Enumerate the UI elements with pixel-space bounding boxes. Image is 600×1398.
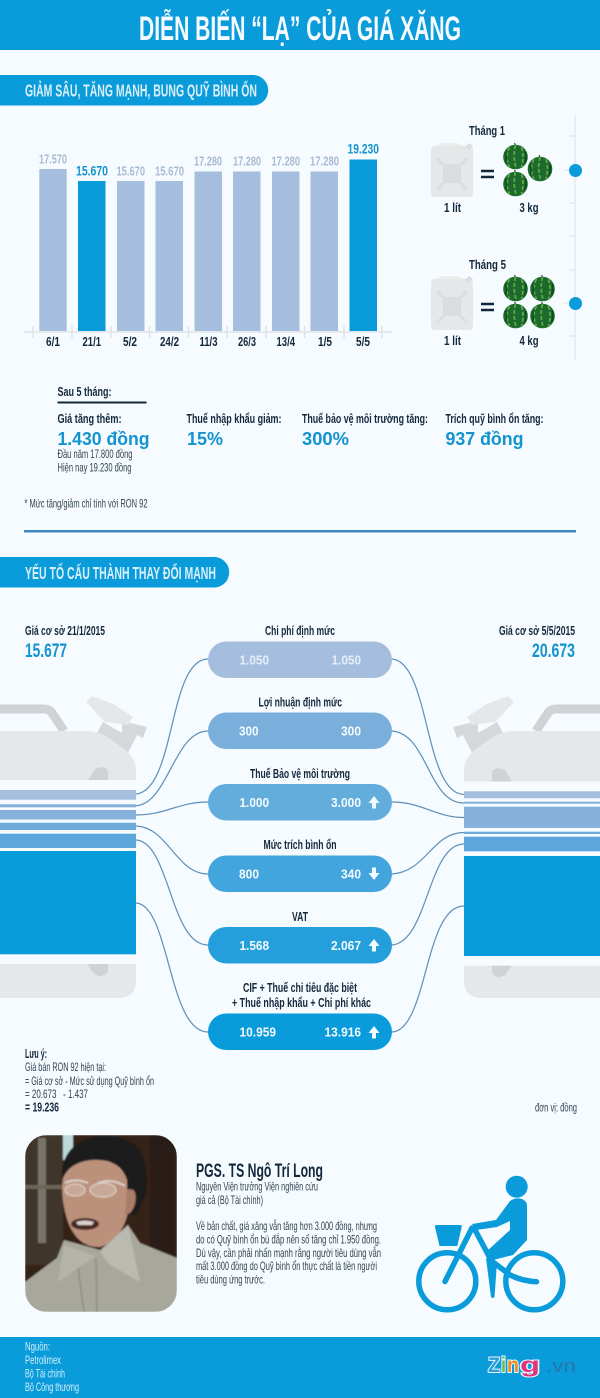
row: norm profit: 300	[341, 724, 361, 738]
bar chart: gasoline price: 11/3	[200, 334, 218, 349]
row: norm profit	[208, 694, 392, 749]
comparison: month 5	[431, 257, 555, 348]
comparison: month 1: 1 lít	[444, 200, 462, 215]
note: Giá bán RON 92 hiện tại:	[25, 1060, 106, 1074]
quote: expert	[196, 1161, 381, 1286]
timeline	[563, 115, 582, 360]
row: stabilization fund	[208, 837, 392, 892]
note: Lưu ý:	[25, 1046, 47, 1061]
quote: expert: Dù vậy, cần phải nhấn mạnh rằng người tiêu dùng vẫn	[196, 1245, 381, 1260]
bar chart: gasoline price: 17.280	[272, 154, 300, 168]
row: stabilization fund: 800	[239, 868, 259, 882]
stats: after 5 months: Sau 5 tháng:	[58, 384, 112, 399]
row: norm profit: 300	[239, 724, 259, 738]
stat: price increase: Đầu năm 17.800 đồng	[58, 447, 132, 461]
row: norm cost: 1.050	[332, 654, 361, 668]
stat: stabilization fund: Trích quỹ bình ổn tăng:	[446, 411, 544, 426]
unit: đơn vị: đồng	[535, 1100, 577, 1114]
bar chart: gasoline price: 6/1	[46, 334, 60, 349]
quote: expert: Về bản chất, giá xăng vẫn tăng hơn 3.000 đồng, nhưng	[196, 1218, 377, 1233]
bar chart: gasoline price: 17.280	[310, 154, 339, 168]
icon: arrow down	[368, 868, 380, 880]
stat: price increase: Hiện nay 19.230 đồng	[58, 460, 132, 474]
stat: environment tax	[302, 411, 428, 449]
note: = Giá cơ sở - Mức sử dụng Quỹ bình ổn	[25, 1074, 154, 1088]
row: VAT	[208, 909, 392, 964]
stat: price increase	[58, 411, 150, 474]
heading: section 1: GIẢM SÂU, TĂNG MẠNH, BUNG QUỸ BÌNH ỔN	[25, 80, 257, 100]
comparison: month 5: Tháng 5	[469, 257, 506, 272]
note: = 19.236	[25, 1100, 59, 1114]
logo: i	[501, 1354, 506, 1377]
row: CIF and other costs: CIF + Thuế chi tiêu đặc biệt	[243, 980, 357, 995]
base price right	[499, 623, 575, 662]
row: environment tax	[208, 766, 392, 820]
row: norm cost	[208, 623, 392, 678]
stat: price increase: Giá tăng thêm:	[58, 411, 122, 426]
row: CIF and other costs: + Thuế nhập khẩu + Chi phí khác	[232, 995, 371, 1010]
sources: Nguồn:	[25, 1340, 50, 1354]
note: = 20.673 - 1.437	[25, 1087, 88, 1101]
icon: arrow up	[368, 939, 380, 952]
stat: environment tax: Thuế bảo vệ môi trường tăng:	[302, 411, 428, 426]
bar chart: gasoline price: 17.280	[233, 154, 261, 168]
sources: Petrolimex	[25, 1353, 61, 1367]
comparison: month 5: 4 kg	[520, 333, 539, 348]
quote: expert: mất 3.000 đồng do Quỹ bình ổn thực chất là tiền người	[196, 1259, 377, 1273]
bar chart: gasoline price: 13/4	[276, 334, 296, 349]
row: norm cost: Chi phí định mức	[265, 623, 335, 638]
fuel can left	[0, 696, 147, 998]
base price left: 15.677	[25, 641, 67, 662]
heading: section 2: YẾU TỐ CẤU THÀNH THAY ĐỔI MẠNH	[25, 562, 216, 583]
comparison: month 1: 3 kg	[520, 200, 539, 215]
bar chart: gasoline price: 24/2	[160, 334, 179, 349]
row: environment tax: Thuế Bảo vệ môi trường	[250, 766, 350, 781]
comparison: month 5: 1 lít	[444, 333, 462, 348]
row: environment tax: 3.000	[331, 796, 361, 810]
note	[25, 1046, 154, 1114]
icon: arrow up	[368, 1026, 380, 1038]
bar chart: gasoline price: 5/2	[123, 334, 137, 349]
bar chart: gasoline price: 1/5	[318, 334, 332, 349]
row: VAT: 2.067	[331, 939, 361, 953]
row: VAT: 1.568	[240, 939, 269, 953]
quote: expert: do có Quỹ bình ổn bù đắp nên số tăng chỉ 1.950 đồng.	[196, 1232, 381, 1246]
icon: arrow up	[368, 796, 380, 808]
stat: price increase: 1.430 đồng	[58, 429, 150, 449]
portrait photo	[25, 1135, 177, 1312]
stat: import tax	[186, 411, 282, 449]
row: CIF and other costs	[208, 980, 392, 1050]
fuel can right	[453, 696, 600, 998]
quote: expert: giá cả (Bộ Tài chính)	[196, 1193, 263, 1207]
bar chart: gasoline price: 17.570	[39, 152, 67, 166]
sources: Bộ Tài chính	[25, 1366, 65, 1380]
stat: stabilization fund	[446, 411, 544, 449]
logo: .vn	[546, 1356, 576, 1376]
row: norm cost: 1.050	[240, 654, 269, 668]
quote: expert: tiêu dùng ứng trước.	[196, 1272, 265, 1286]
footer	[0, 1337, 600, 1398]
bar chart: gasoline price: 21/1	[82, 334, 101, 349]
bar chart: gasoline price: 15.670	[76, 164, 108, 178]
title	[0, 0, 600, 50]
row: CIF and other costs: 13.916	[324, 1026, 361, 1040]
comparison: month 1	[431, 123, 552, 215]
sources	[25, 1340, 79, 1394]
row: stabilization fund: Mức trích bình ổn	[264, 837, 337, 852]
stat: import tax: 15%	[187, 429, 223, 449]
stat: environment tax: 300%	[302, 429, 349, 449]
bar chart: gasoline price: 26/3	[238, 334, 256, 349]
row: VAT: VAT	[292, 909, 308, 924]
bar chart: gasoline price: 19.230	[348, 142, 379, 156]
quote: expert: Nguyên Viện trưởng Viện nghiên cứu	[196, 1180, 318, 1194]
base price right: 20.673	[532, 641, 575, 662]
stat: stabilization fund: 937 đồng	[446, 429, 524, 449]
base price left: Giá cơ sở 21/1/2015	[25, 623, 105, 638]
bar chart: gasoline price	[24, 142, 392, 349]
logo: n	[507, 1354, 519, 1377]
quote: expert: PGS. TS Ngô Trí Long	[196, 1161, 323, 1182]
logo	[488, 1354, 576, 1377]
bar chart: gasoline price: 15.670	[116, 164, 145, 178]
bar chart: gasoline price: 5/5	[356, 334, 370, 349]
connectors	[136, 659, 464, 1032]
base price left	[25, 623, 105, 662]
heading: section 2	[0, 557, 229, 588]
logo: Z	[488, 1354, 500, 1377]
row: environment tax: 1.000	[240, 796, 269, 810]
icon: cyclist	[419, 1176, 563, 1310]
logo: g	[520, 1354, 540, 1377]
heading: section 1	[0, 75, 268, 106]
row: norm profit: Lợi nhuận định mức	[258, 694, 342, 710]
sources: Bộ Công thương	[25, 1380, 79, 1394]
stats: after 5 months	[58, 384, 544, 474]
bar chart: gasoline price: 17.280	[194, 154, 222, 168]
footnote: * Mức tăng/giảm chỉ tính với RON 92	[24, 496, 148, 510]
row: CIF and other costs: 10.959	[240, 1026, 276, 1040]
row: stabilization fund: 340	[341, 868, 361, 882]
comparison: month 1: Tháng 1	[469, 123, 505, 138]
stat: import tax: Thuế nhập khẩu giảm:	[186, 411, 282, 426]
bar chart: gasoline price: 15.670	[155, 164, 184, 178]
